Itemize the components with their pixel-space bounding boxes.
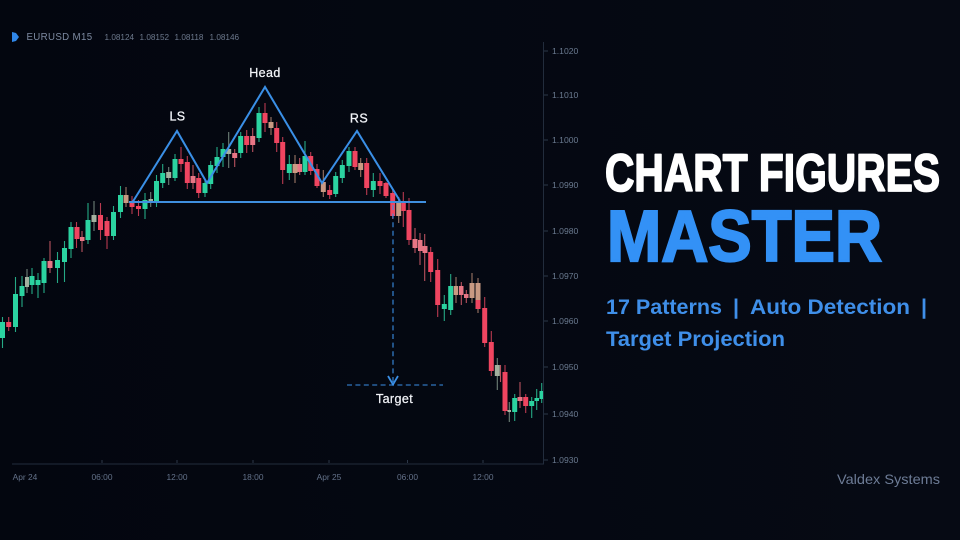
label: RS: RS: [350, 112, 368, 126]
time axis: [12, 460, 544, 482]
target line: [347, 384, 443, 386]
subtitle line 1: |: [733, 295, 739, 319]
label: Head: Head: [249, 66, 281, 80]
subtitle line 2: Target Projection: [606, 327, 785, 351]
price axis: 1.0950: [552, 362, 579, 372]
neckline: [129, 201, 426, 203]
subtitle line 1: |: [921, 295, 927, 319]
price axis: 1.0960: [552, 316, 579, 326]
price axis: 1.1010: [552, 90, 579, 100]
price axis: [543, 42, 579, 465]
price axis: 1.0990: [552, 180, 579, 190]
chart header: symbol and OHLC: [12, 32, 240, 43]
head and shoulders outline: [132, 87, 400, 203]
OHLC values: 1.08118: [174, 33, 204, 42]
OHLC values: 1.08124: [104, 33, 135, 42]
time axis: 12:00: [473, 472, 494, 482]
time axis: 12:00: [167, 472, 188, 482]
time axis: 06:00: [397, 472, 418, 482]
OHLC values: 1.08152: [140, 33, 170, 42]
symbol label: EURUSD M15: [26, 32, 92, 43]
candlestick series: [0, 103, 543, 422]
price axis: 1.1020: [552, 46, 579, 56]
label: LS: LS: [169, 110, 186, 124]
time axis: Apr 25: [317, 472, 342, 482]
OHLC values: 1.08146: [210, 33, 240, 42]
time axis: 18:00: [243, 472, 264, 482]
price axis: 1.0980: [552, 226, 579, 236]
target projection arrow: [388, 205, 398, 384]
price axis: 1.0940: [552, 409, 579, 419]
title line 2: MASTER: [607, 197, 882, 277]
subtitle line 1: 17 Patterns: [606, 295, 722, 319]
subtitle line 1: [606, 295, 927, 319]
time axis: 06:00: [92, 472, 113, 482]
label: Target: Target: [376, 392, 413, 406]
price axis: 1.1000: [552, 135, 579, 145]
icon: logo mark: [12, 32, 19, 42]
price axis: 1.0930: [552, 455, 579, 465]
brand: Valdex Systems: Valdex Systems: [837, 471, 940, 487]
price axis: 1.0970: [552, 271, 579, 281]
time axis: Apr 24: [13, 472, 38, 482]
subtitle line 1: Auto Detection: [750, 295, 910, 319]
